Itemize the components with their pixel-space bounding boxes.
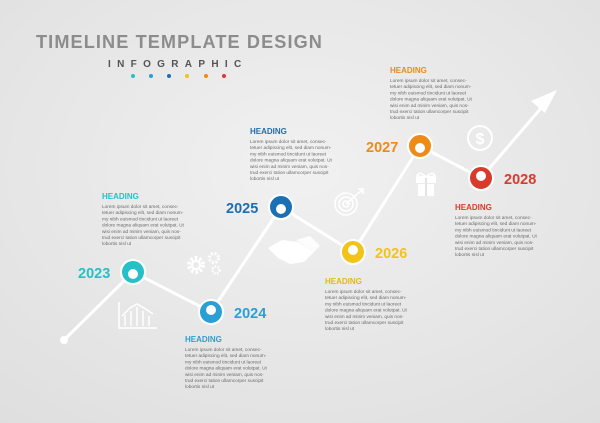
node 2028	[469, 166, 493, 190]
year labels: 2027	[366, 140, 398, 156]
year labels: 2024	[234, 306, 266, 322]
icon: gift	[416, 173, 436, 196]
color dots	[131, 74, 226, 78]
text block 2028: HEADING	[455, 203, 492, 212]
text block 2026: HEADING	[325, 277, 362, 286]
text block 2027	[390, 66, 473, 121]
text block 2028	[455, 203, 538, 258]
node 2023	[121, 260, 145, 284]
year labels: 2025	[226, 201, 258, 217]
text block 2027: HEADING	[390, 66, 427, 75]
icon: gears	[189, 254, 220, 274]
node 2024	[199, 300, 223, 324]
year labels: 2026	[375, 246, 407, 262]
node 2026	[341, 240, 365, 264]
year labels: 2023	[78, 266, 110, 282]
text block 2026	[325, 277, 408, 332]
text block 2023	[102, 192, 185, 247]
text block 2025: HEADING	[250, 127, 287, 136]
subtitle: INFOGRAPHIC	[108, 59, 248, 70]
year labels	[78, 140, 536, 322]
year labels: 2028	[504, 172, 536, 188]
icon: dollar coin	[468, 126, 492, 150]
node 2027	[408, 134, 432, 158]
icon: bar chart	[119, 302, 157, 328]
timeline line with arrow	[60, 90, 557, 344]
text block 2024	[185, 335, 268, 390]
icon: target	[335, 189, 363, 215]
text block 2024: HEADING	[185, 335, 222, 344]
text block 2025	[250, 127, 333, 182]
node 2025	[269, 195, 293, 219]
text block 2023: HEADING	[102, 192, 139, 201]
title: TIMELINE TEMPLATE DESIGN	[36, 32, 323, 52]
icon: handshake	[268, 236, 320, 264]
icon: dollar coin: $	[476, 131, 485, 148]
